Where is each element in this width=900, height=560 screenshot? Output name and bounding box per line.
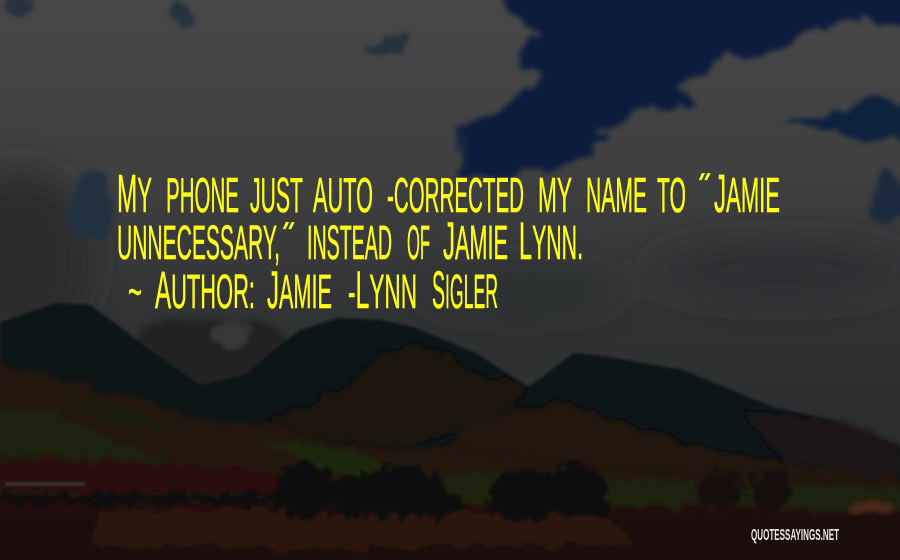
quote line 1: " <box>688 166 715 201</box>
quote line 1: NAME <box>586 169 647 223</box>
quote line 2: INSTEAD <box>307 217 392 270</box>
quote text: SIGLER <box>432 261 498 320</box>
mountains: brown flanks <box>270 345 900 500</box>
quote line 2: OF <box>407 217 430 270</box>
quote line 1: MY <box>117 164 152 224</box>
mountains: dark silhouette <box>0 303 900 490</box>
quote line 1: MY <box>538 169 572 223</box>
author attribution: -LYNN <box>348 261 417 320</box>
foreground: trees <box>0 462 790 521</box>
quote line 1: JUST <box>250 169 303 223</box>
quote line 1: AUTO <box>313 169 373 223</box>
sky: blue gap between clouds <box>459 0 900 177</box>
mountains <box>0 303 900 560</box>
quote line 1: JAMIE <box>714 164 780 224</box>
quote line 1: -CORRECTED <box>387 169 524 223</box>
author attribution: AUTHOR: <box>155 261 255 320</box>
quote line 1: TO <box>657 169 686 223</box>
author attribution <box>128 261 498 320</box>
mountains: misty saddle <box>130 320 300 400</box>
author attribution: ~ <box>128 266 142 319</box>
quote text <box>117 164 780 320</box>
quote line 2: " <box>272 215 299 250</box>
quote line 2: UNNECESSARY, <box>117 217 280 270</box>
quote line 1 <box>117 164 780 224</box>
quote line 2: JAMIE <box>443 212 508 271</box>
foreground: red bush <box>850 500 894 514</box>
foreground: hillsides and fields <box>0 355 900 560</box>
author attribution: JAMIE <box>267 261 332 320</box>
quote line 1: PHONE <box>166 169 239 223</box>
quote line 2: LYNN. <box>519 212 583 271</box>
foreground: pale streak <box>5 482 85 486</box>
